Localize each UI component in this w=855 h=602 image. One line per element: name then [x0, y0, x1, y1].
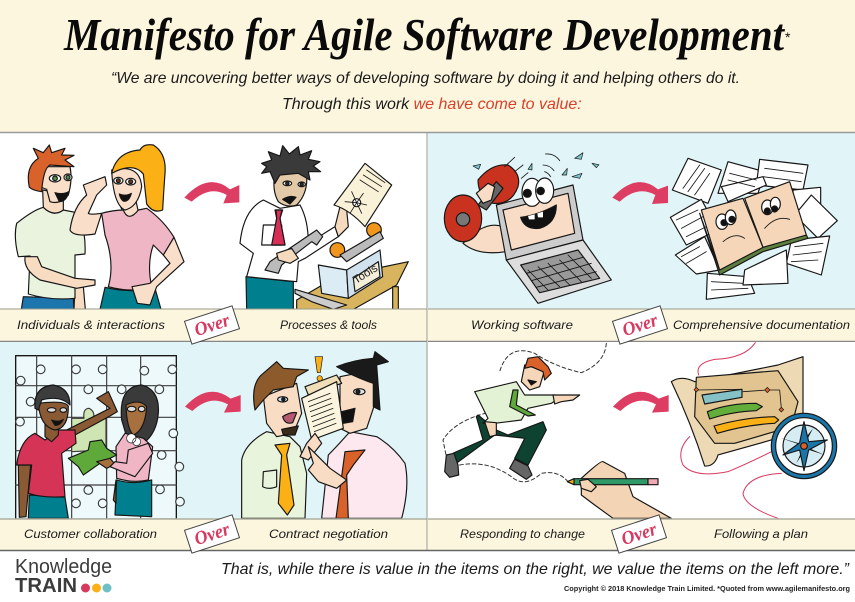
man talking: [15, 145, 95, 309]
copyright: Copyright © 2018 Knowledge Train Limited. *Quoted from www.agilemanifesto.org: [564, 584, 850, 593]
dashed path: [443, 343, 606, 482]
sad book with papers: [670, 158, 837, 299]
over tag 4: Over: [619, 519, 660, 550]
over tag 1: Over: [192, 310, 233, 341]
closing quote: That is, while there is value in the items on the right, we value the items on the left more.”: [221, 561, 850, 578]
over tag 4: [612, 515, 666, 553]
label: contract negotiation: Contract negotiation: [269, 527, 388, 541]
hand drawing with pencil: [567, 462, 671, 518]
panel: working software: [428, 133, 855, 342]
logo: Knowledge Train: Knowledge: [15, 556, 112, 578]
red route lines: [681, 343, 781, 518]
laptop lifting dumbbell: [444, 153, 611, 303]
stressed man with tools: Tools: [351, 262, 380, 287]
logo: Knowledge Train: [15, 556, 112, 597]
over tag 3: Over: [192, 519, 233, 550]
arrow: [185, 392, 241, 413]
stressed man with tools: [240, 146, 408, 309]
label: responding to change: Responding to change: [460, 527, 585, 541]
over tag 1: [185, 306, 239, 344]
logo: Knowledge Train: TRAIN: [15, 575, 77, 597]
two men arguing over contract: [242, 352, 407, 518]
compass: [771, 413, 837, 479]
project map: [671, 357, 803, 466]
title asterisk: *: [785, 29, 791, 45]
panel: responding to change: [428, 342, 855, 550]
over tag 3: [185, 515, 239, 553]
arrow: [613, 392, 669, 413]
running man: [445, 357, 580, 479]
label: working software: Working software: [471, 318, 573, 332]
over tag 2: Over: [620, 310, 661, 341]
arrow: [184, 182, 239, 203]
girl holding puzzle piece: [68, 385, 158, 517]
arrow: [612, 182, 668, 204]
jigsaw wall: [16, 356, 184, 519]
label: customer collaboration: Customer collaboration: [24, 527, 157, 541]
title: Manifesto for Agile Software Development: [63, 9, 785, 60]
panel: customer collaboration: [0, 342, 427, 550]
intro line two: Through this work we have come to value:: [282, 96, 582, 113]
over tag 2: [613, 306, 667, 344]
panel: individuals and interactions: [0, 133, 427, 342]
label: individuals: Individuals & interactions: [17, 318, 165, 332]
boy placing puzzle: [17, 385, 117, 518]
label: following a plan: Following a plan: [714, 527, 808, 541]
intro line: “We are uncovering better ways of developing software by doing it and helping others do it.: [111, 70, 740, 87]
header panel: [0, 0, 855, 132]
woman talking: [70, 145, 184, 309]
label: comprehensive documentation: Comprehensive documentation: [673, 318, 850, 332]
label: processes: Processes & tools: [280, 318, 377, 332]
